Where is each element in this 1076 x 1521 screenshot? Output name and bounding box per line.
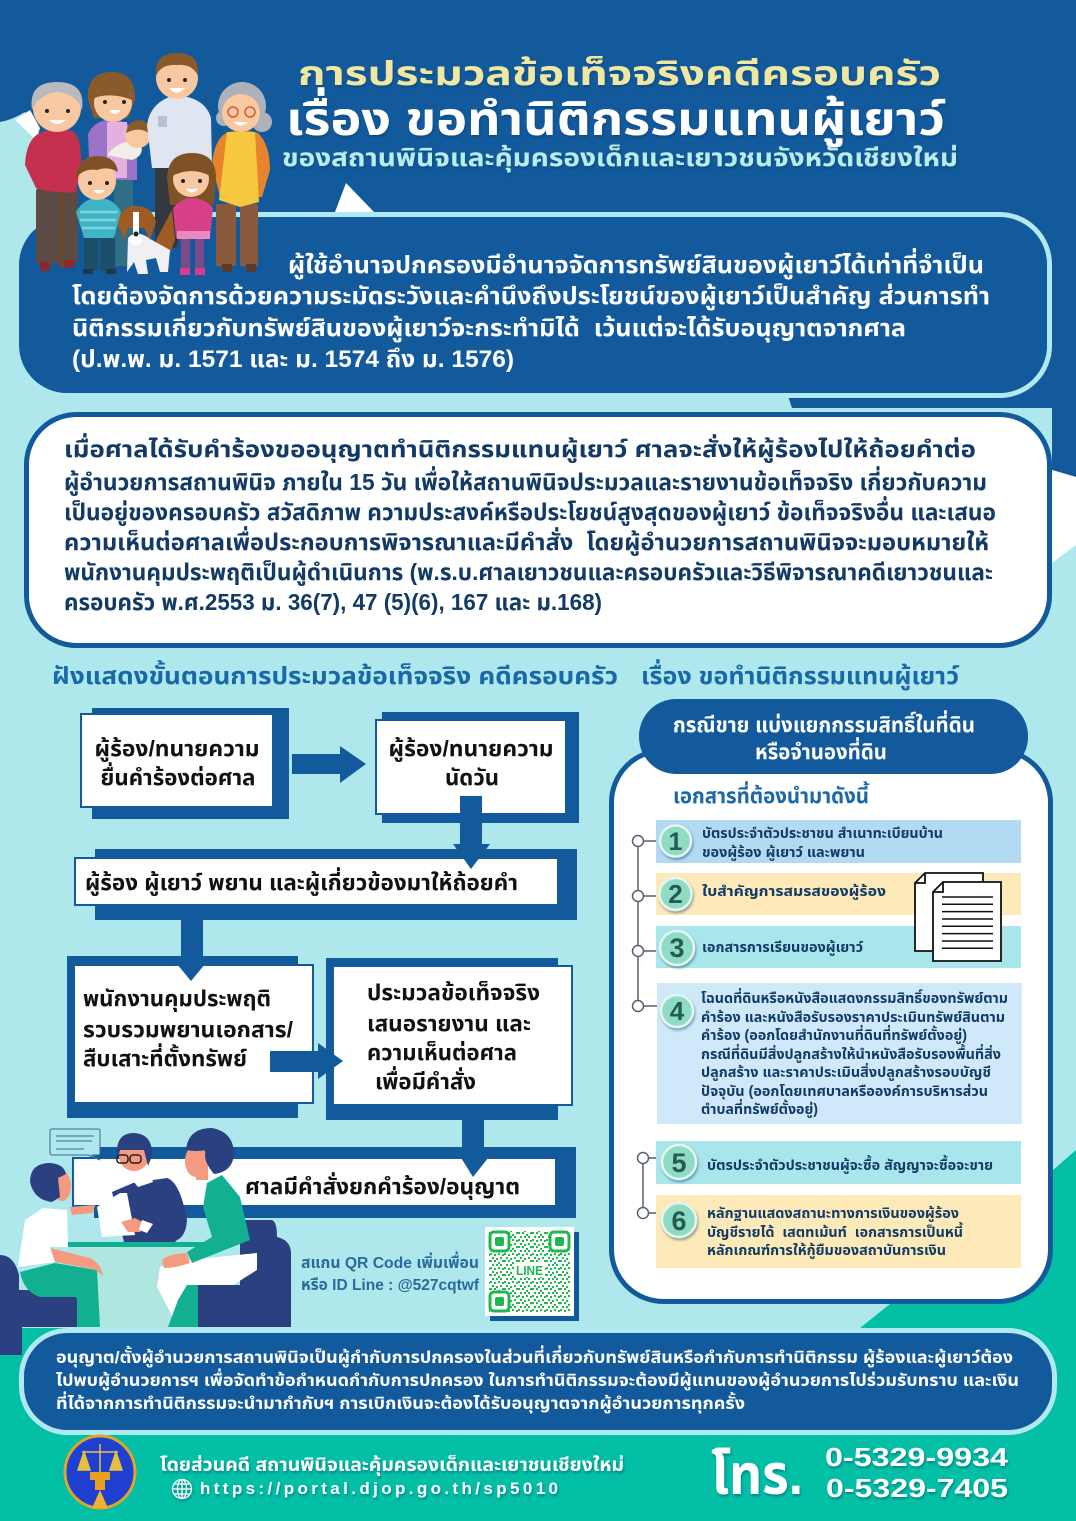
step: file petition: ยื่นคำร้องต่อศาล bbox=[100, 762, 256, 790]
arrow: step 5 to 6 bbox=[458, 1105, 492, 1177]
step: report to court: ประมวลข้อเท็จจริง bbox=[367, 980, 540, 1005]
item 1: ของผู้ร้อง ผู้เยาว์ และพยาน bbox=[702, 845, 865, 862]
item 4: คำร้อง (ออกโดยสำนักงานที่ดินที่ทรัพย์ตั้งอยู่) bbox=[701, 1024, 967, 1045]
QR caption bbox=[301, 1251, 480, 1294]
step: court order: ศาลมีคำสั่งยกคำร้อง/อนุญาต bbox=[245, 1172, 520, 1200]
step: give statements: ผู้ร้อง ผู้เยาว์ พยาน และผู้เกี่ยวข้องมาให้ถ้อยคำ bbox=[85, 867, 518, 896]
item 2 bbox=[656, 873, 1021, 915]
item 4: ปลูกสร้าง และราคาประเมินสิ่งปลูกสร้างรอบบัญชี bbox=[701, 1062, 991, 1082]
panel header bbox=[639, 699, 1028, 774]
step: probation officer bbox=[67, 956, 313, 1118]
item 1 bbox=[656, 820, 1021, 863]
panel: court order explanation: พนักงานคุมประพฤติเป็นผู้ดำเนินการ (พ.ร.บ.ศาลเยาวชนและครอบครัวและวิธีพิจารณาคดีเยาวชนและ bbox=[64, 559, 993, 586]
icon: documents bbox=[915, 873, 1001, 961]
step: give statements bbox=[75, 849, 577, 920]
arrow: step 2 to 3 bbox=[453, 796, 490, 869]
footer: office name and website: โดยส่วนคดี สถานพินิจและคุ้มครองเด็กและเยาชนเชียงใหม่ bbox=[160, 1453, 624, 1476]
table bbox=[68, 1242, 203, 1327]
panel: guardianship note: ที่ได้จากการทำนิติกรรมจะนำมากำกับฯ การเบิกเงินจะต้องได้รับอนุญาตจากผู้อำนวยการทุกครั้ง bbox=[56, 1391, 745, 1414]
panel: guardianship note: อนุญาต/ตั้งผู้อำนวยการสถานพินิจเป็นผู้กำกับการปกครองในส่วนที่เกี่ยวกับทรัพย์สินหรือกำกับการทำนิติกรรม ผู้ร้องและผู้เยาว์ต้อง bbox=[56, 1345, 1013, 1368]
step: report to court bbox=[326, 958, 572, 1120]
panel: guardianship note bbox=[22, 1330, 1054, 1432]
girl bbox=[167, 153, 216, 275]
step: probation officer: สืบเสาะที่ตั้งทรัพย์ bbox=[83, 1043, 247, 1071]
grandmother bbox=[212, 82, 272, 272]
QR caption: หรือ ID Line : @527cqtwf bbox=[301, 1277, 480, 1294]
item 4: โฉนดที่ดินหรือหนังสือแสดงกรรมสิทธิ์ของทรัพย์ตาม bbox=[701, 987, 1008, 1007]
panel: guardianship note: ไปพบผู้อำนวยการฯ เพื่อจัดทำข้อกำหนดกำกับการปกครอง ในการทำนิติกรรมจะต้องมีผู้แทนของผู้อำนวยการไปร่วมรับทราบ และเงิน bbox=[56, 1368, 1019, 1391]
icon: globe bbox=[172, 1480, 192, 1498]
right sofa bbox=[198, 1220, 291, 1327]
item 6: หลักเกณฑ์การให้กู้ยืมของสถาบันการเงิน bbox=[707, 1243, 946, 1260]
item 2: ใบสำคัญการสมรสของผู้ร้อง bbox=[702, 884, 886, 901]
panel: legal authority: (ป.พ.พ. ม. 1571 และ ม. 1574 ถึง ม. 1576) bbox=[72, 345, 514, 373]
arrow: step 3 to 4 bbox=[172, 920, 210, 981]
timeline bbox=[632, 836, 657, 1218]
dog bbox=[118, 206, 175, 274]
item 4: ปัจจุบัน (ออกโดยเทศบาลหรือองค์การบริหารส่วน bbox=[701, 1083, 988, 1100]
flow heading bbox=[52, 659, 960, 691]
QR code: LINE bbox=[516, 1263, 543, 1278]
panel: court order explanation: ความเห็นต่อศาลเพื่อประกอบการพิจารณาและมีคำสั่ง โดยผู้อำนวยการสถานพินิจจะมอบหมายให้ bbox=[64, 526, 989, 556]
panel header: หรือจำนองที่ดิน bbox=[755, 737, 887, 764]
item 3: เอกสารการเรียนของผู้เยาว์ bbox=[702, 940, 863, 957]
flow heading: ฝังแสดงขั้นตอนการประมวลข้อเท็จจริง คดีครอบครัว bbox=[52, 660, 618, 690]
father bbox=[147, 53, 212, 248]
footer: phone bbox=[711, 1442, 1009, 1506]
documents heading: เอกสารที่ต้องนำมาดังนี้ bbox=[673, 781, 870, 808]
step: set date: นัดวัน bbox=[445, 765, 499, 790]
panel: court order explanation: ครอบครัว พ.ศ.2553 ม. 36(7), 47 (5)(6), 167 และ ม.168) bbox=[64, 589, 602, 615]
panel: court order explanation bbox=[26, 414, 1050, 646]
panel header: กรณีขาย แบ่งแยกกรรมสิทธิ์ในที่ดิน bbox=[673, 710, 975, 737]
grandfather bbox=[25, 82, 82, 271]
item 1: บัตรประจำตัวประชาชน สำเนาทะเบียนบ้าน bbox=[702, 826, 943, 842]
panel: court order explanation: เป็นอยู่ของครอบครัว สวัสดิภาพ ความประสงค์หรือประโยชน์สูงสุดของผู้เยาว์ ข้อเท็จจริงอื่น และเสนอ bbox=[64, 496, 996, 526]
panel: required documents bbox=[612, 699, 1050, 1302]
step: probation officer: พนักงานคุมประพฤติ bbox=[83, 986, 271, 1012]
item 5: 5 bbox=[671, 1148, 687, 1178]
footer: office name and website: https://portal.djop.go.th/sp5010 bbox=[200, 1479, 558, 1498]
item 6: บัญชีรายได้ เสตทเม้นท์ เอกสารการเป็นหนี้ bbox=[707, 1221, 964, 1241]
item 6 bbox=[656, 1195, 1021, 1268]
item 4: คำร้อง และหนังสือรับรองราคาประเมินทรัพย์สินตาม bbox=[701, 1010, 1005, 1026]
title bbox=[282, 55, 958, 173]
step: set date: ผู้ร้อง/ทนายความ bbox=[388, 736, 554, 762]
step: set date bbox=[376, 712, 579, 823]
panel: legal authority bbox=[19, 214, 1050, 396]
item 2: 2 bbox=[668, 879, 683, 909]
item 4: 4 bbox=[670, 996, 685, 1026]
logo: department emblem bbox=[65, 1436, 135, 1508]
title: เรื่อง ขอทำนิติกรรมแทนผู้เยาว์ bbox=[286, 87, 946, 147]
illustration: family bbox=[25, 53, 272, 275]
item 6: 6 bbox=[671, 1206, 687, 1236]
step: report to court: เสนอรายงาน และ bbox=[367, 1011, 531, 1036]
arrow: step 4 to 5 bbox=[270, 1043, 343, 1079]
step: report to court: ความเห็นต่อศาล bbox=[367, 1040, 517, 1065]
item 3 bbox=[656, 926, 1021, 968]
QR caption: สแกน QR Code เพิ่มเพื่อน bbox=[301, 1251, 479, 1272]
step: report to court: เพื่อมีคำสั่ง bbox=[375, 1066, 476, 1094]
panel: court order explanation: ผู้อำนวยการสถานพินิจ ภายใน 15 วัน เพื่อให้สถานพินิจประมวลและรายงานข้อเท็จจริง เกี่ยวกับความ bbox=[64, 466, 987, 496]
footer: phone: 0-5329-9934 bbox=[825, 1442, 1009, 1472]
flowchart bbox=[67, 708, 579, 1218]
mother bbox=[88, 72, 152, 266]
panel: legal authority: นิติกรรมเกี่ยวกับทรัพย์สินของผู้เยาว์จะกระทำมิได้ เว้นแต่จะได้รับอนุญาตจากศาล bbox=[72, 311, 906, 343]
arrow: step 1 to 2 bbox=[292, 746, 366, 783]
item 1: 1 bbox=[669, 828, 683, 856]
man bbox=[97, 1133, 187, 1242]
step: file petition bbox=[81, 708, 289, 819]
item 6: หลักฐานแสดงสถานะทางการเงินของผู้ร้อง bbox=[707, 1206, 959, 1223]
woman bbox=[157, 1128, 257, 1327]
illustration: consultation bbox=[0, 1128, 291, 1355]
left sofa bbox=[0, 1255, 78, 1355]
boy bbox=[76, 156, 121, 274]
flow heading: เรื่อง ขอทำนิติกรรมแทนผู้เยาว์ bbox=[641, 659, 960, 691]
item 3: 3 bbox=[669, 933, 685, 963]
item 4 bbox=[657, 983, 1022, 1124]
QR code bbox=[485, 1227, 579, 1321]
step: probation officer: รวบรวมพยานเอกสาร/ bbox=[83, 1017, 293, 1042]
footer: phone: 0-5329-7405 bbox=[826, 1473, 1008, 1503]
step: court order bbox=[73, 1147, 576, 1218]
title: การประมวลข้อเท็จจริงคดีครอบครัว bbox=[298, 55, 941, 93]
panel: legal authority: ผู้ใช้อำนาจปกครองมีอำนาจจัดการทรัพย์สินของผู้เยาว์ได้เท่าที่จำเป็น bbox=[288, 248, 984, 280]
item 5 bbox=[656, 1141, 1021, 1184]
footer: office name and website bbox=[160, 1453, 624, 1498]
speech bubble bbox=[50, 1129, 100, 1160]
panel: court order explanation: เมื่อศาลได้รับคำร้องขออนุญาตทำนิติกรรมแทนผู้เยาว์ ศาลจะสั่งให้ผู้ร้องไปให้ถ้อยคำต่อ bbox=[64, 433, 976, 463]
child bbox=[18, 1163, 103, 1327]
title: ของสถานพินิจและคุ้มครองเด็กและเยาวชนจังหวัดเชียงใหม่ bbox=[282, 144, 958, 173]
step: file petition: ผู้ร้อง/ทนายความ bbox=[94, 736, 260, 762]
item 4: ตำบลที่ทรัพย์ตั้งอยู่) bbox=[701, 1098, 818, 1119]
item 5: บัตรประจำตัวประชาชนผู้จะซื้อ สัญญาจะซื้อจะขาย bbox=[707, 1154, 993, 1175]
item 4: กรณีที่ดินมีสิ่งปลูกสร้างให้นำหนังสือรับรองพื้นที่สิ่ง bbox=[701, 1043, 1001, 1064]
panel: legal authority: โดยต้องจัดการด้วยความระมัดระวังและคำนึงถึงประโยชน์ของผู้เยาว์เป็นสำคัญ ส่วนการทำ bbox=[72, 282, 990, 311]
footer: phone: โทร. bbox=[711, 1443, 803, 1506]
